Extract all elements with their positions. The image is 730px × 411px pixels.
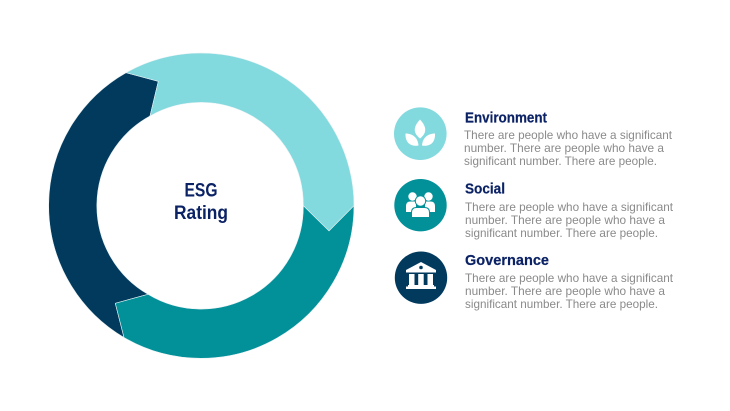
donut chart — [49, 53, 354, 358]
center label: ESG — [184, 180, 218, 202]
heading: Social — [465, 180, 505, 198]
text block: significant number. There are people. — [464, 154, 657, 168]
heading: Environment — [465, 110, 547, 126]
item: governance — [395, 252, 674, 311]
text block — [465, 271, 674, 311]
segment: navy — [49, 73, 158, 337]
center label: Rating — [174, 203, 228, 224]
segment: teal — [115, 206, 354, 358]
text block: There are people who have a significant — [465, 271, 674, 285]
icon: people — [394, 179, 447, 231]
text block: significant number. There are people. — [465, 226, 658, 240]
text block: number. There are people who have a — [465, 213, 665, 227]
item: environment — [394, 107, 673, 168]
text block — [465, 200, 674, 240]
text block: There are people who have a significant — [465, 200, 674, 214]
heading: Governance — [465, 252, 549, 269]
item: social — [394, 179, 674, 240]
text block: number. There are people who have a — [465, 284, 665, 298]
text block: number. There are people who have a — [464, 141, 664, 155]
icon: leaves — [394, 107, 447, 160]
segment: light teal — [126, 53, 354, 231]
text block: significant number. There are people. — [465, 297, 658, 311]
center label — [174, 180, 228, 224]
text block: There are people who have a significant — [464, 128, 673, 142]
icon: bank building — [395, 252, 447, 304]
text block — [464, 128, 673, 168]
